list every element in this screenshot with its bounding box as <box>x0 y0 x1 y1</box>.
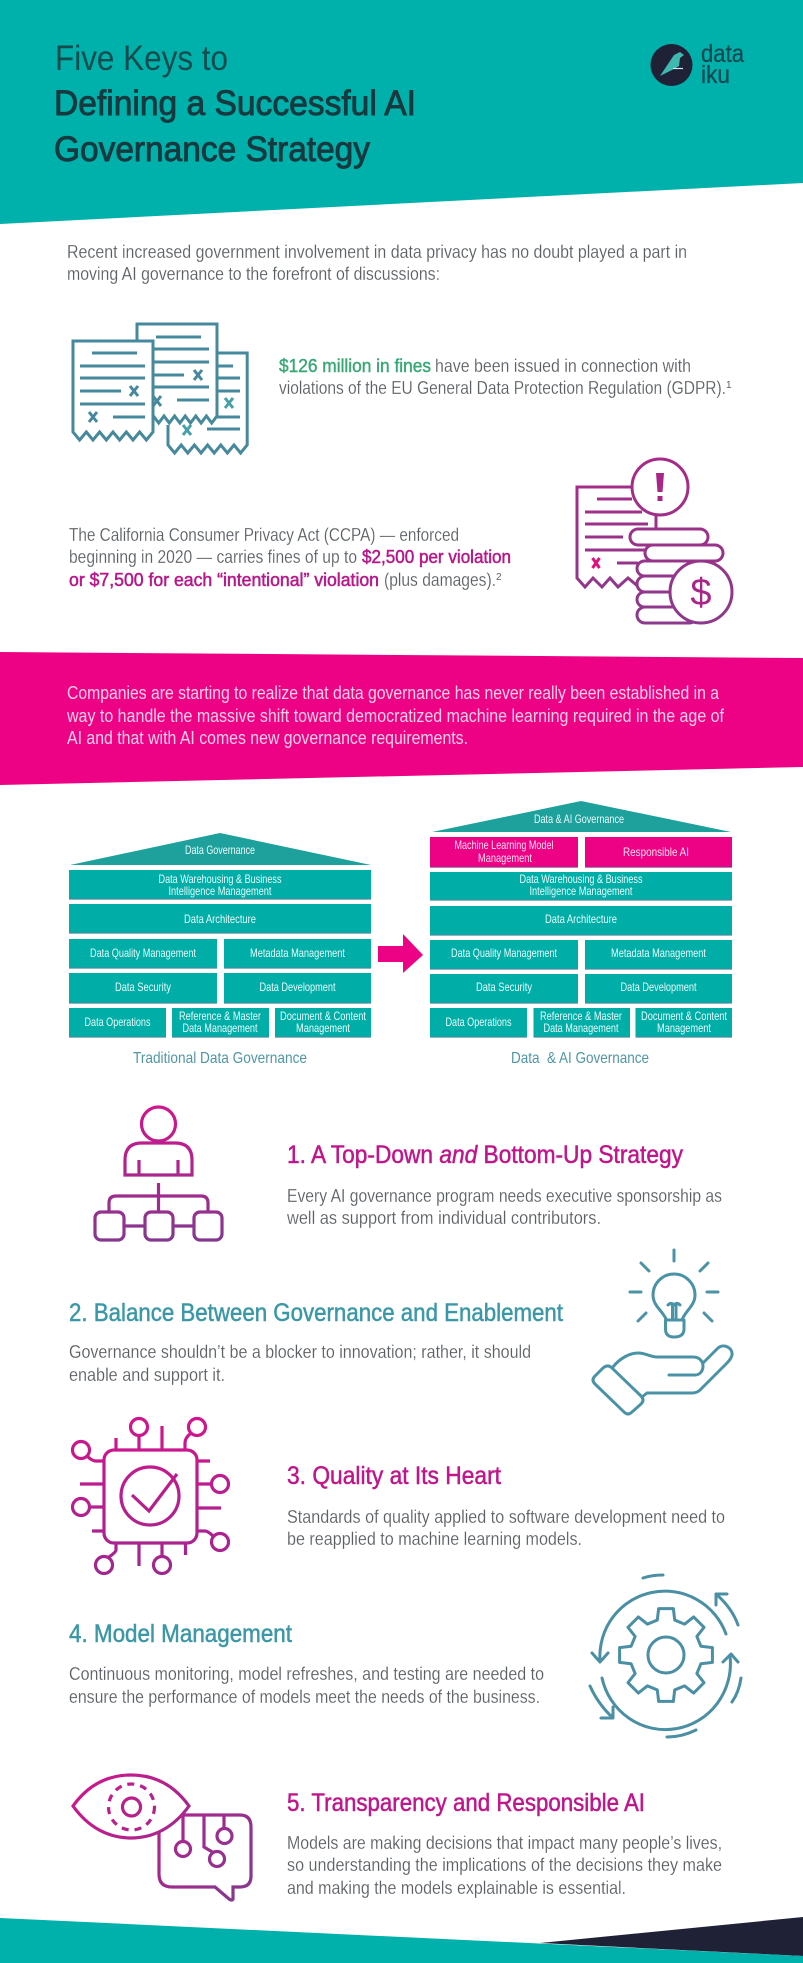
layer: data warehousing: Intelligence Management <box>168 884 272 898</box>
icon: eye and chat circuit <box>73 1775 251 1900</box>
layer: document and content: Document & Content <box>280 1009 367 1023</box>
title <box>54 39 416 169</box>
layer: data operations <box>430 1008 527 1037</box>
intro text: Recent increased government involvement in data privacy has no doubt played a part in <box>67 242 687 262</box>
layer: data security: Data Security <box>115 980 171 994</box>
body <box>287 1833 722 1898</box>
logo: dataiku <box>650 40 744 89</box>
roof <box>70 833 371 865</box>
band text: way to handle the massive shift toward democratized machine learning required in the age of <box>66 706 725 726</box>
layer: data architecture: Data Architecture <box>545 912 617 926</box>
layer: data security <box>69 973 217 1003</box>
layer: data quality: Data Quality Management <box>451 946 558 960</box>
layer: data quality <box>69 939 217 968</box>
layer: document and content <box>636 1008 732 1037</box>
icon: receipt with coins and alert <box>577 459 732 623</box>
layer: document and content <box>275 1008 371 1037</box>
layer: document and content: Management <box>657 1021 712 1035</box>
layer: document and content: Management <box>296 1021 351 1035</box>
heading: 2. Balance Between Governance and Enablement <box>69 1299 563 1327</box>
section 4 <box>69 1620 544 1707</box>
layer: data architecture <box>430 906 732 935</box>
text: CCPA fines: beginning in 2020 — carries fines of up to <box>69 547 357 567</box>
layer: data warehousing <box>430 872 732 900</box>
footer banner: dark <box>540 1917 803 1956</box>
layer: data warehousing: Intelligence Management <box>530 884 633 898</box>
text: CCPA fines: 2 <box>496 572 502 583</box>
layer: metadata: Metadata Management <box>250 946 346 960</box>
body <box>286 1186 722 1228</box>
layer: data quality <box>430 940 578 969</box>
body: Every AI governance program needs executive sponsorship as <box>287 1186 722 1206</box>
layer: data development: Data Development <box>620 980 697 994</box>
section 1 <box>286 1141 722 1228</box>
icon: receipt with coins and alert: $ <box>690 572 712 614</box>
layer: data security <box>430 974 578 1003</box>
body: enable and support it. <box>69 1365 225 1385</box>
intro text: moving AI governance to the forefront of discussions: <box>67 264 440 284</box>
pink band <box>0 652 803 785</box>
text: GDPR fines: violations of the EU General Data Protection Regulation (GDPR). <box>279 378 726 398</box>
layer: data operations <box>69 1008 166 1037</box>
band text: AI and that with AI comes new governance requirements. <box>67 728 468 748</box>
body: so understanding the implications of the decisions they make <box>287 1855 722 1875</box>
layer: data development <box>224 973 371 1003</box>
diagram: data and AI governance <box>430 801 732 1037</box>
layer: machine learning model management: Management <box>478 851 533 865</box>
layer: reference and master data <box>534 1008 630 1037</box>
text: GDPR fines: $126 million in fines <box>279 356 431 376</box>
band text <box>66 683 725 748</box>
footer banner: teal <box>0 1918 803 1963</box>
intro text <box>67 242 687 284</box>
logo: dataiku: data <box>701 40 744 68</box>
title: Governance Strategy <box>54 130 370 169</box>
heading: 5. Transparency and Responsible AI <box>287 1789 645 1817</box>
layer: reference and master data: Data Management <box>544 1021 619 1035</box>
layer: data quality: Data Quality Management <box>90 946 197 960</box>
body <box>69 1664 544 1707</box>
body: and making the models explainable is essential. <box>287 1878 626 1898</box>
text: GDPR fines: have been issued in connection with <box>435 356 691 376</box>
icon: stacked receipts <box>73 324 247 453</box>
section 3 <box>287 1462 725 1549</box>
body: Models are making decisions that impact many people’s lives, <box>287 1833 722 1853</box>
body: ensure the performance of models meet the needs of the business. <box>69 1687 540 1707</box>
layer: metadata <box>585 940 732 969</box>
text: GDPR fines: 1 <box>726 380 732 391</box>
body: be reapplied to machine learning models. <box>287 1529 582 1549</box>
layer: reference and master data: Reference & Master <box>179 1009 261 1023</box>
layer: data development <box>585 974 732 1003</box>
text: GDPR fines <box>279 356 732 398</box>
layer: responsible AI <box>585 837 732 867</box>
layer: data development: Data Development <box>260 980 336 994</box>
body: well as support from individual contributors. <box>286 1208 601 1228</box>
text: CCPA fines: $2,500 per violation <box>362 547 511 567</box>
layer: reference and master data <box>172 1008 269 1037</box>
layer: metadata: Metadata Management <box>611 946 707 960</box>
text: CCPA fines: (plus damages). <box>384 570 496 590</box>
layer: reference and master data: Data Management <box>182 1021 258 1035</box>
section 5 <box>287 1789 722 1898</box>
header banner <box>0 0 803 224</box>
layer: data operations: Data Operations <box>84 1015 150 1029</box>
title: Defining a Successful AI <box>54 84 416 123</box>
icon: org chart person <box>95 1107 222 1240</box>
section 2 <box>69 1299 563 1385</box>
band text: Companies are starting to realize that data governance has never really been established in a <box>67 683 720 703</box>
layer: data security: Data Security <box>476 980 532 994</box>
body: Continuous monitoring, model refreshes, and testing are needed to <box>69 1664 544 1684</box>
layer: machine learning model management: Machine Learning Model <box>454 838 554 852</box>
text: CCPA fines: The California Consumer Privacy Act (CCPA) — enforced <box>69 525 459 545</box>
layer: data architecture: Data Architecture <box>184 912 256 926</box>
body <box>287 1507 725 1549</box>
caption: traditional: Traditional Data Governance <box>133 1050 307 1067</box>
title: Five Keys to <box>55 39 228 78</box>
icon: lightbulb in hand <box>593 1250 732 1414</box>
heading: 3. Quality at Its Heart <box>287 1462 501 1490</box>
layer: document and content: Document & Content <box>641 1009 728 1023</box>
diagram: traditional data governance <box>69 833 371 1037</box>
roof <box>432 801 731 832</box>
body: Governance shouldn’t be a blocker to innovation; rather, it should <box>69 1342 531 1362</box>
logo: dataiku: iku <box>701 61 730 89</box>
layer: responsible AI: Responsible AI <box>623 845 689 859</box>
text: CCPA fines <box>69 525 511 590</box>
arrow <box>378 934 423 973</box>
roof: Data Governance <box>185 843 255 857</box>
icon: gear with cycle arrows <box>590 1575 741 1737</box>
heading: 1. A Top-Down and Bottom-Up Strategy <box>287 1141 683 1169</box>
body: Standards of quality applied to software development need to <box>287 1507 725 1527</box>
body <box>69 1342 531 1385</box>
layer: machine learning model management <box>430 837 578 867</box>
layer: metadata <box>224 939 371 968</box>
icon: chip with check <box>72 1418 228 1574</box>
layer: data architecture <box>69 904 371 933</box>
roof: Data & AI Governance <box>534 812 624 826</box>
heading: 4. Model Management <box>69 1620 292 1648</box>
layer: data warehousing <box>69 870 371 899</box>
layer: data warehousing: Data Warehousing & Business <box>158 872 282 886</box>
layer: reference and master data: Reference & Master <box>540 1009 622 1023</box>
layer: data operations: Data Operations <box>446 1015 512 1029</box>
layer: data warehousing: Data Warehousing & Business <box>520 872 642 886</box>
caption: data and AI: Data & AI Governance <box>511 1050 649 1067</box>
text: CCPA fines: or $7,500 for each “intentional” violation <box>69 570 379 590</box>
